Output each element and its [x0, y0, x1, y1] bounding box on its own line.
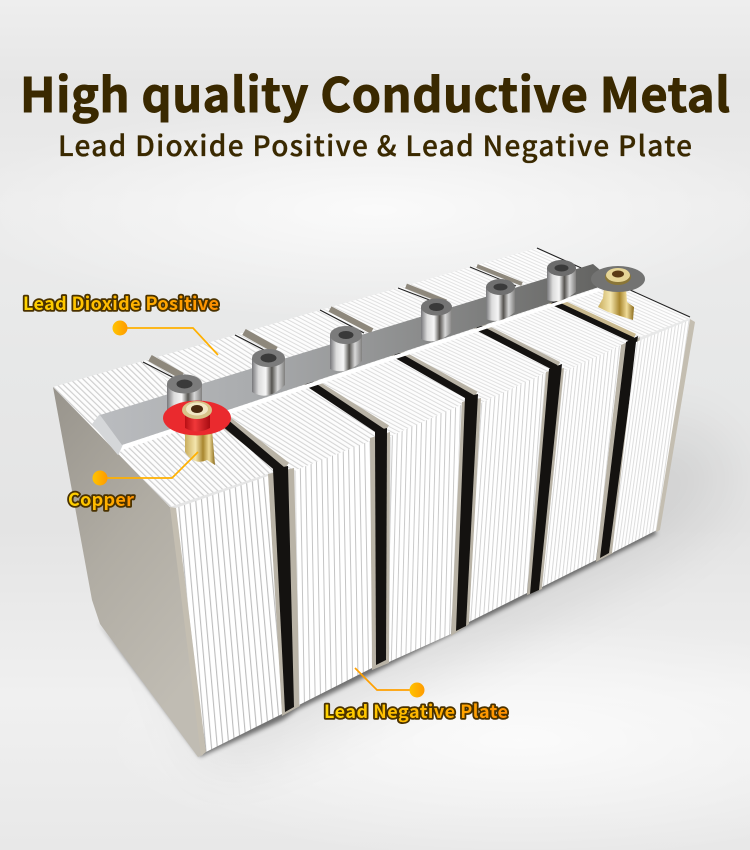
callout: lead negative plate	[324, 668, 508, 724]
red collar	[185, 410, 210, 432]
battery floor shadow	[98, 420, 740, 770]
back rail slots	[143, 248, 690, 379]
callout: lead dioxide positive: Lead Dioxide Positive	[23, 290, 219, 316]
copper screw body	[185, 430, 215, 465]
callout: copper	[68, 452, 198, 512]
plate rims	[170, 319, 695, 756]
plate fronts	[176, 320, 690, 752]
red positive terminal	[163, 400, 231, 465]
plate gaps	[222, 299, 640, 716]
battery block	[53, 248, 695, 757]
subtitle: Lead Dioxide Positive & Lead Negative Plate	[58, 125, 692, 165]
metal bus bar	[93, 264, 612, 454]
gold nut right	[605, 268, 631, 285]
callout: lead negative plate: Lead Negative Plate	[324, 698, 508, 724]
title: High quality Conductive Metal	[20, 57, 730, 126]
plate tops	[53, 248, 690, 507]
callout: lead dioxide positive	[23, 290, 219, 355]
gold negative terminal	[591, 266, 645, 320]
callout: copper: Copper	[68, 486, 134, 512]
copper screw body right	[598, 288, 634, 320]
red washer	[163, 400, 231, 436]
grey washer	[591, 266, 645, 292]
gold nut	[182, 401, 212, 419]
side panel	[53, 387, 203, 757]
cylinder studs	[167, 260, 576, 418]
